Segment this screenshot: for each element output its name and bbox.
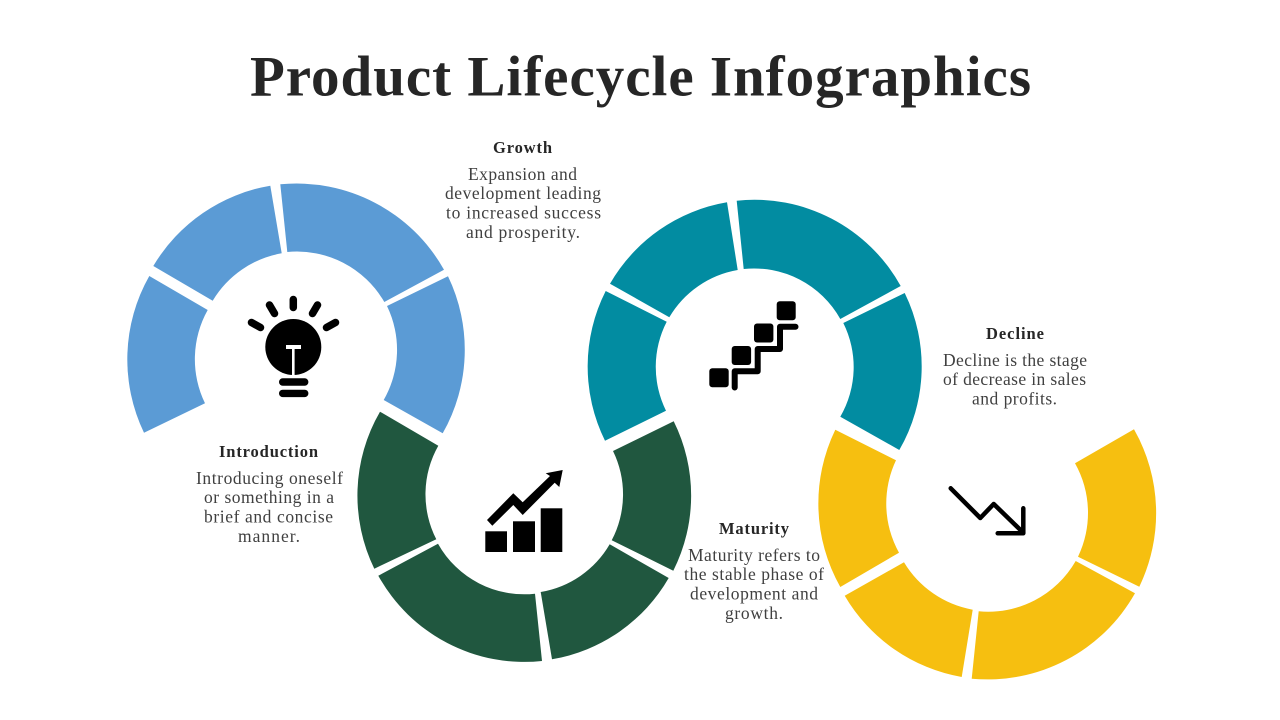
- icon: rising bar chart: [485, 470, 563, 552]
- text block: growth: [445, 138, 601, 242]
- text block: maturity: [684, 519, 824, 623]
- title: Product Lifecycle Infographics: [250, 46, 1031, 108]
- text block: decline: Decline is the stage: [943, 350, 1087, 370]
- text block: growth: to increased success: [446, 202, 601, 222]
- text block: introduction: manner.: [238, 526, 300, 546]
- text block: maturity: growth.: [725, 603, 783, 623]
- text block: growth: and prosperity.: [466, 222, 580, 242]
- text block: maturity: the stable phase of: [684, 564, 824, 584]
- text block: introduction: Introducing oneself: [196, 468, 343, 488]
- text block: decline: of decrease in sales: [943, 369, 1086, 389]
- ring: blue introduction: [127, 184, 465, 433]
- text block: growth: development leading: [445, 183, 601, 203]
- text block: growth: Growth: [493, 138, 552, 157]
- text block: decline: Decline: [986, 324, 1044, 343]
- text block: maturity: Maturity: [719, 519, 790, 538]
- text block: introduction: [196, 442, 343, 546]
- text block: maturity: development and: [690, 584, 818, 604]
- text block: decline: [943, 324, 1087, 408]
- text block: maturity: Maturity refers to: [688, 545, 820, 565]
- icon: stairs: [709, 301, 796, 388]
- text block: decline: and profits.: [972, 388, 1057, 408]
- icon: falling arrow: [951, 488, 1023, 533]
- ring: yellow decline: [818, 429, 1156, 679]
- ring: teal growth: [588, 200, 922, 450]
- text block: introduction: brief and concise: [204, 506, 333, 526]
- text block: introduction: Introduction: [219, 442, 318, 461]
- text block: introduction: or something in a: [204, 487, 334, 507]
- icon: light bulb: [252, 300, 336, 397]
- text block: growth: Expansion and: [468, 164, 577, 184]
- ring: green maturity: [357, 412, 691, 662]
